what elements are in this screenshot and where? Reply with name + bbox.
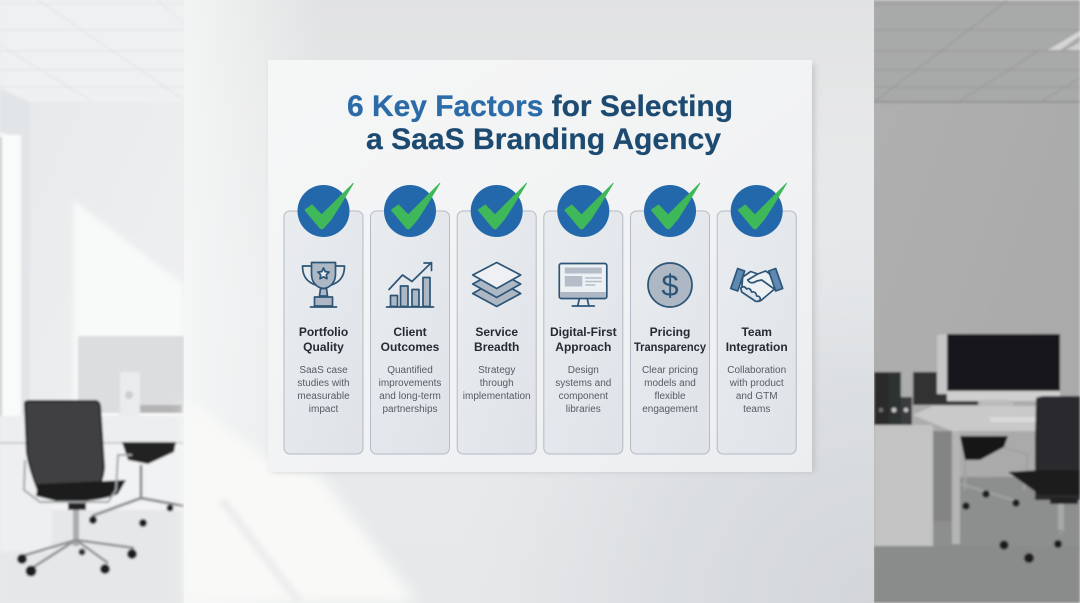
background: left office scene [0, 0, 186, 603]
icon: dollar coin: $ [661, 268, 679, 303]
right ceiling [874, 0, 1080, 103]
left desk [0, 416, 184, 442]
icon: growth chart [386, 262, 434, 307]
card: Pricing Transparency: models and [644, 378, 696, 389]
card: Team Integration: with product [729, 378, 784, 389]
icon: trophy [302, 262, 344, 307]
card: Client Outcomes: improvements [379, 378, 441, 389]
card: Service Breadth: Breadth [474, 340, 519, 354]
right cabinet [874, 425, 933, 546]
binders [874, 372, 912, 425]
heading: Portfolio [299, 325, 348, 339]
check badge [298, 183, 353, 237]
card: Portfolio Quality [284, 183, 363, 454]
description: Strategy [478, 365, 515, 376]
title line 1: 6 Key Factors for Selecting [347, 90, 733, 123]
back chair right [960, 436, 1028, 510]
heading: Client [393, 325, 427, 339]
title [347, 90, 733, 156]
icon: layers [473, 262, 521, 306]
card: Portfolio Quality: studies with [297, 378, 350, 389]
card: Team Integration [717, 183, 796, 454]
card: Digital-First Approach: systems and [555, 378, 611, 389]
left monitor [78, 336, 184, 422]
board shadow [271, 64, 815, 472]
card: Service Breadth [457, 183, 536, 454]
back chair [89, 442, 184, 527]
right desk [913, 406, 1080, 544]
heading: Pricing [650, 325, 690, 339]
icon: monitor [559, 264, 607, 306]
description: Collaboration [727, 365, 786, 376]
description: Quantified [387, 365, 433, 376]
card: Pricing Transparency: Transparency [634, 340, 706, 354]
central wall [184, 0, 874, 603]
card: Pricing Transparency: engagement [642, 404, 698, 415]
card: Client Outcomes [370, 183, 450, 454]
heading: Team [741, 325, 772, 339]
check badge [557, 183, 613, 237]
icon: handshake [731, 268, 783, 302]
background: right office scene [872, 0, 1080, 603]
card: Client Outcomes: partnerships [382, 404, 438, 415]
description: Design [568, 365, 599, 376]
left ceiling [0, 0, 186, 140]
card: Pricing Transparency: flexible [654, 391, 686, 402]
check badge [644, 183, 700, 237]
card: Service Breadth: through [480, 378, 514, 389]
title line 2: a SaaS Branding Agency [366, 123, 721, 156]
left floor [0, 510, 184, 603]
card: Digital-First Approach: component [559, 391, 608, 402]
panel: board [268, 60, 812, 472]
heading: Digital-First [550, 325, 617, 339]
card: Digital-First Approach: Approach [555, 340, 611, 354]
card: Portfolio Quality: impact [309, 404, 338, 415]
right floor [874, 477, 1080, 603]
card: Digital-First Approach: libraries [566, 404, 601, 415]
card: Digital-First Approach [544, 183, 623, 454]
card: Portfolio Quality: measurable [297, 391, 350, 402]
check badge [384, 183, 440, 237]
check badge [471, 183, 526, 237]
check badge [731, 183, 786, 237]
heading: Service [475, 325, 518, 339]
card: Portfolio Quality: Quality [303, 340, 344, 354]
card: Team Integration: Integration [726, 340, 788, 354]
card: Client Outcomes: Outcomes [381, 340, 440, 354]
left cabinet [0, 445, 52, 552]
card: Service Breadth: implementation [463, 391, 531, 402]
left wall with sunlight [0, 102, 186, 437]
front chair right [999, 396, 1080, 563]
description: Clear pricing [642, 365, 698, 376]
card: Team Integration: and GTM [736, 391, 778, 402]
card: Pricing Transparency [630, 183, 710, 454]
icon: dollar coin [648, 263, 692, 307]
front chair [17, 401, 137, 576]
main monitor [937, 334, 1060, 416]
card: Team Integration: teams [743, 404, 770, 415]
rear monitor [913, 372, 978, 405]
description: SaaS case [299, 365, 348, 376]
card: Client Outcomes: and long-term [379, 391, 441, 402]
